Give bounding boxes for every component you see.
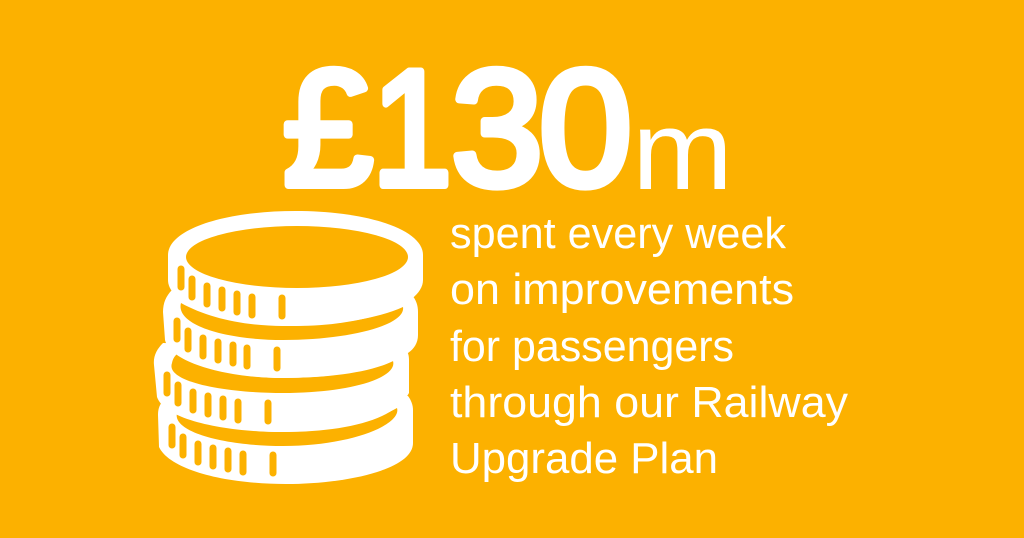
text block: description: spent every week bbox=[450, 209, 787, 258]
text block: description: through our Railway bbox=[450, 378, 848, 427]
text block: description: for passengers bbox=[450, 322, 734, 371]
text block: description bbox=[450, 209, 848, 483]
heading: £130m bbox=[283, 36, 733, 220]
coin 2 bbox=[163, 290, 418, 378]
text block: description: Upgrade Plan bbox=[450, 434, 718, 483]
coin 3 bbox=[154, 343, 409, 432]
heading: £130m: 0 bbox=[539, 36, 632, 220]
heading: £130m: 3 bbox=[451, 36, 543, 220]
icon: stack of coins bbox=[154, 211, 423, 484]
text block: description: on improvements bbox=[450, 265, 794, 314]
heading: £130m: 1 bbox=[372, 36, 452, 220]
coin 1 (top) bbox=[168, 211, 423, 326]
coin 4 (bottom) bbox=[158, 396, 413, 484]
heading: £130m: £ bbox=[283, 36, 373, 220]
heading: £130m: m bbox=[632, 88, 733, 213]
